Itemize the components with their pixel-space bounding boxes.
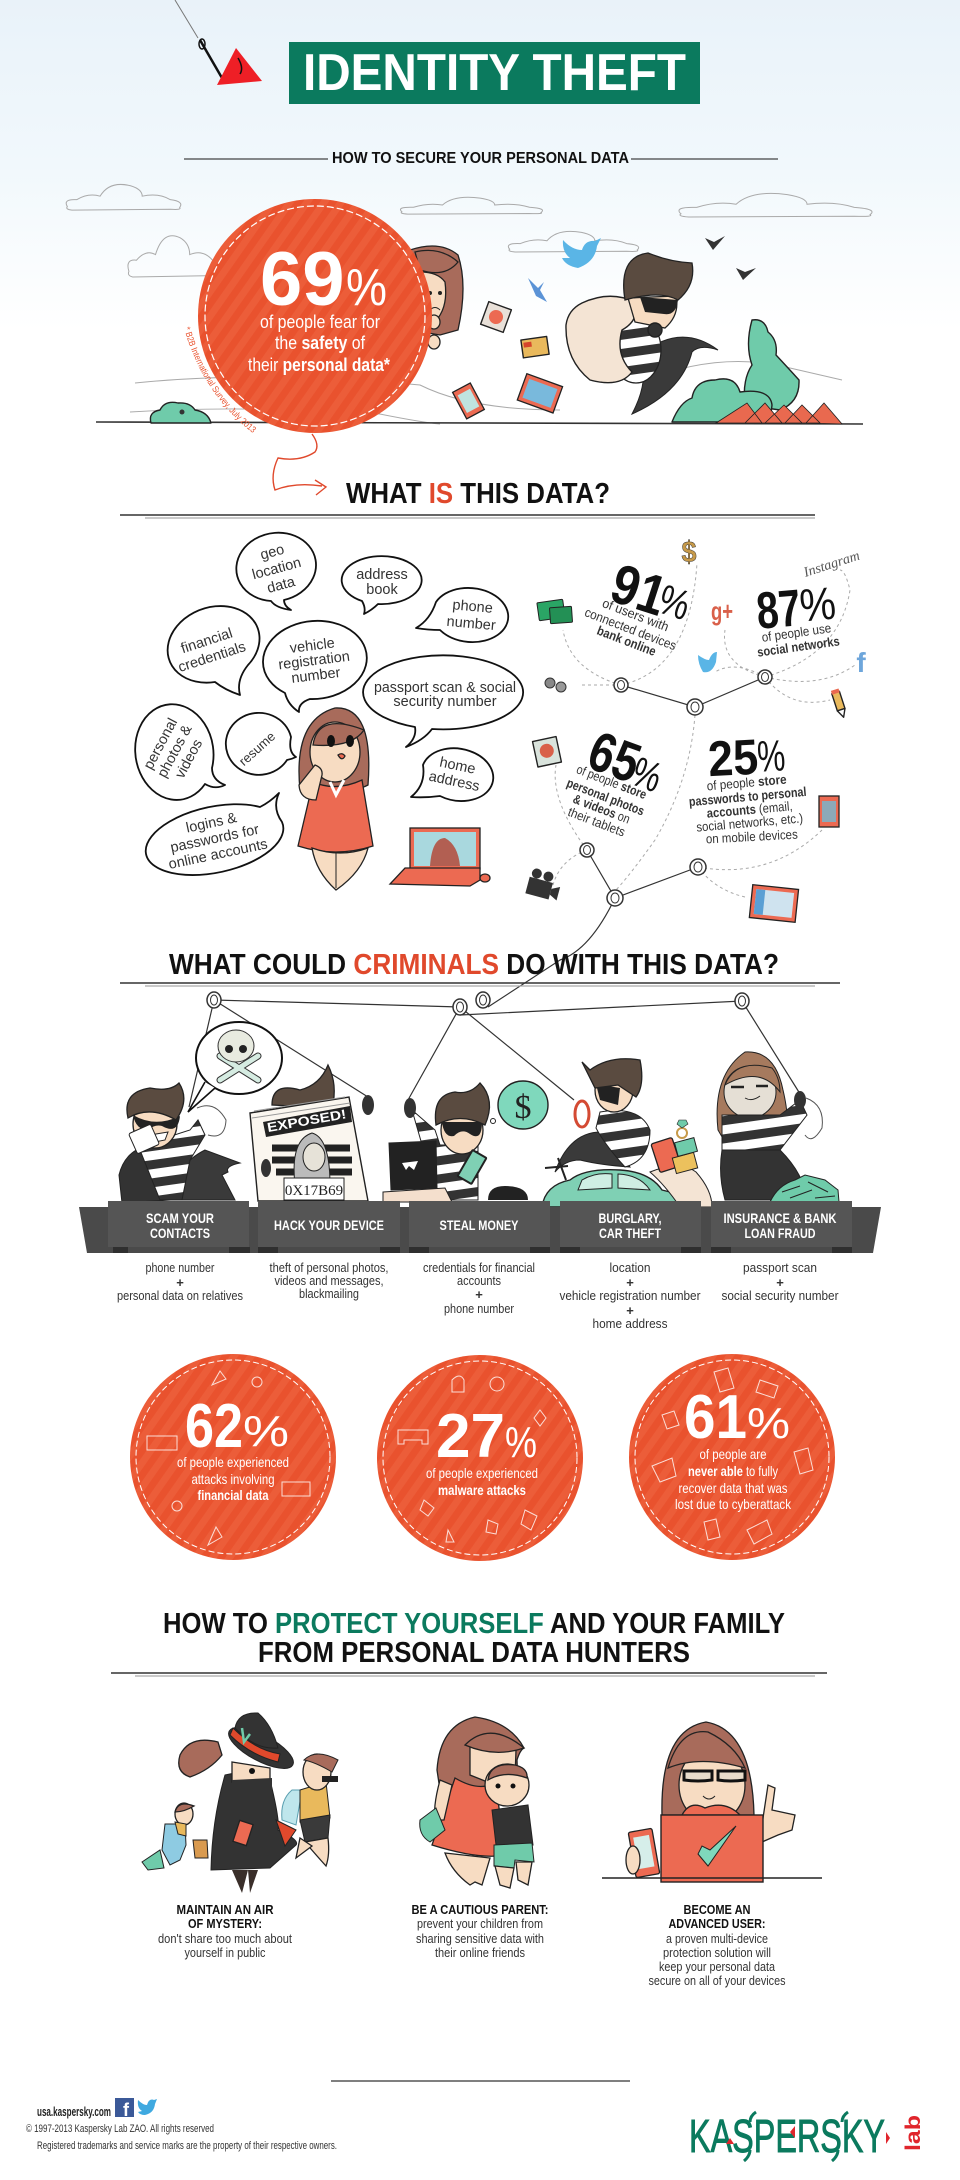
clouds	[66, 184, 872, 277]
stat: 65 percent: of people store	[574, 762, 649, 802]
money pile	[770, 1175, 839, 1202]
text: scam your contacts details: phone number	[146, 1260, 215, 1275]
title: IDENTITY THEFT	[303, 44, 686, 102]
stat circle: 62 percent: attacks involving	[192, 1471, 274, 1487]
stat circle: 62 percent: 62	[185, 1392, 243, 1461]
icon: facebook: f	[123, 2100, 130, 2120]
bubble: address book: book	[366, 582, 398, 598]
footer text	[26, 2104, 337, 2152]
stat circle: 62 percent	[130, 1354, 336, 1560]
bubble: phone number	[416, 588, 508, 642]
stat: 87 percent: 87	[754, 579, 803, 641]
stat circle: 61 percent	[629, 1354, 835, 1560]
text: burglary details	[560, 1260, 701, 1331]
bubble: passport scan and social security number: passport scan & social	[374, 680, 516, 696]
icon: phone	[453, 383, 484, 419]
bubble: personal photos and videos: photos &	[155, 722, 196, 781]
text: be a cautious parent: prevent your children from	[417, 1916, 543, 1931]
stat circle: 61 percent: never able to fully	[688, 1463, 778, 1479]
icon: fishing hook	[175, 0, 262, 85]
main stat circle: their personal data*	[248, 355, 390, 375]
heading: how to protect yourself: HOW TO PROTECT YOURSELF AND YOUR FAMILY	[163, 1608, 785, 1640]
text: maintain an air of mystery	[158, 1902, 292, 1960]
text: maintain an air of mystery: MAINTAIN AN AIR	[176, 1902, 274, 1917]
stat circle: 62 percent: %	[243, 1407, 289, 1456]
icon: instagram wordmark: Instagram	[801, 549, 862, 581]
stat circle: 61 percent: of people are	[700, 1446, 767, 1462]
bubble: resume: resume	[236, 729, 278, 769]
panel: steal money	[409, 1201, 550, 1253]
panel: hack your device	[258, 1201, 400, 1253]
child	[485, 1764, 534, 1888]
node	[607, 890, 623, 906]
bubble: geo location data: data	[265, 574, 298, 597]
car thief	[542, 1059, 687, 1207]
text: maintain an air of mystery: yourself in public	[184, 1945, 266, 1960]
bubble: vehicle registration number: number	[291, 665, 341, 687]
node	[690, 859, 706, 875]
hat	[223, 1713, 299, 1776]
stat circle: 27 percent: of people experienced	[426, 1465, 538, 1481]
thief with newspaper	[250, 1065, 374, 1201]
panel: steal money: STEAL MONEY	[440, 1217, 519, 1233]
icon: facebook f: f	[856, 647, 866, 678]
text: become an advanced user: ADVANCED USER:	[668, 1916, 766, 1931]
bubble: phone number: number	[446, 614, 496, 634]
text: burglary details: vehicle registration number	[560, 1288, 701, 1303]
bush right	[672, 320, 799, 422]
text: burglary details: +	[626, 1275, 634, 1290]
footer text: Registered trademarks and service marks are the property of their respective owners.	[37, 2140, 337, 2152]
text: burglary details: +	[626, 1303, 634, 1318]
text: steal money details: phone number	[444, 1301, 515, 1316]
text: be a cautious parent	[412, 1902, 548, 1960]
heading: how to protect yourself: FROM PERSONAL DATA HUNTERS	[258, 1637, 690, 1669]
dollar bubble	[490, 1081, 548, 1129]
pocket phone	[233, 1820, 253, 1846]
icon: coins	[545, 678, 566, 692]
main stat circle: %	[346, 259, 387, 317]
text: scam your contacts details	[117, 1260, 243, 1303]
bubble: geo location data: location	[251, 555, 303, 583]
main stat circle	[198, 199, 432, 433]
stat: 25 percent: of people store	[706, 772, 787, 793]
stat circle: 27 percent	[377, 1355, 583, 1561]
thief with sack	[566, 253, 718, 414]
text: become an advanced user: secure on all of your devices	[648, 1973, 786, 1988]
text: hack your device details: blackmailing	[299, 1286, 359, 1301]
icon: pencil	[831, 688, 847, 719]
stat: 87 percent: %	[797, 577, 838, 632]
icon: dollar sign: $	[682, 536, 697, 569]
stat: 87 percent: of people use	[761, 620, 832, 645]
text: hack your device details	[270, 1260, 388, 1301]
dollar bubble: $	[514, 1089, 532, 1126]
stat circle: 62 percent: of people experienced	[177, 1454, 289, 1470]
footer text: usa.kaspersky.com	[37, 2104, 111, 2119]
heading: what is this data: WHAT IS THIS DATA?	[346, 478, 610, 510]
network connectors	[189, 563, 855, 1107]
stat circle: 61 percent: lost due to cyberattack	[675, 1496, 792, 1512]
text: steal money details: credentials for financial	[423, 1260, 535, 1275]
heading: how to protect yourself	[111, 1608, 827, 1676]
thief with newspaper: 0X17B69	[285, 1183, 343, 1199]
main stat circle: of people fear for	[260, 312, 380, 332]
stat: 91 percent: 91	[604, 551, 674, 628]
bubble: home address	[411, 748, 493, 801]
subtitle: HOW TO SECURE YOUR PERSONAL DATA	[332, 150, 629, 167]
icon: photos	[481, 302, 511, 332]
stat: 91 percent: %	[653, 575, 696, 629]
icon: twitter small	[698, 652, 717, 672]
text: fraud details: +	[776, 1275, 784, 1290]
footer text: © 1997-2013 Kaspersky Lab ZAO. All rights reserved	[26, 2123, 214, 2135]
arrow: curly	[273, 434, 326, 495]
bubble: home address: home	[438, 755, 477, 778]
stat circle: 27 percent: malware attacks	[438, 1482, 526, 1498]
bubble: resume	[226, 713, 296, 775]
ribbon	[79, 1201, 881, 1253]
stat: 25 percent	[688, 729, 807, 846]
stat: 25 percent: social networks, etc.)	[696, 810, 804, 835]
peeking girl	[410, 246, 463, 349]
panel: burglary car theft	[560, 1201, 701, 1253]
icon: facebook	[115, 2098, 134, 2120]
panel: hack your device: HACK YOUR DEVICE	[274, 1217, 384, 1233]
bubble: personal photos and videos	[135, 704, 225, 800]
icon: google plus: g+	[711, 596, 733, 626]
stat circle: 61 percent: recover data that was	[678, 1480, 788, 1496]
text: maintain an air of mystery: don't share too much about	[158, 1931, 292, 1946]
text: fraud details: social security number	[722, 1288, 839, 1303]
icon: twitter	[138, 2099, 157, 2115]
text: hack your device details: theft of personal photos,	[270, 1260, 388, 1275]
bubble: geo location data: geo	[259, 542, 286, 563]
footnote: * B2B International Survey, July 2013	[186, 326, 256, 432]
panel: scam your contacts: SCAM YOUR	[146, 1210, 214, 1226]
panel: burglary car theft: CAR THEFT	[599, 1225, 661, 1241]
text: become an advanced user: protection solution will	[663, 1945, 771, 1960]
bubble: vehicle registration number	[263, 621, 367, 712]
icon: tablet coral	[749, 885, 799, 922]
text: scam your contacts details: +	[176, 1275, 184, 1290]
text: become an advanced user: keep your personal data	[659, 1959, 776, 1974]
panel: scam your contacts: CONTACTS	[150, 1225, 210, 1241]
text: be a cautious parent: sharing sensitive data with	[416, 1931, 544, 1946]
text: become an advanced user: BECOME AN	[684, 1902, 750, 1917]
node	[207, 992, 221, 1008]
skull bubble	[188, 1022, 282, 1112]
stat: 91 percent: of users with	[600, 595, 671, 634]
text: hack your device details: videos and messages,	[274, 1273, 384, 1288]
panel: insurance and bank loan fraud: LOAN FRAUD	[744, 1225, 816, 1241]
bubble: passport scan and social security number	[363, 655, 523, 747]
stat circle: 27 percent: %	[505, 1418, 537, 1467]
laptop	[390, 828, 490, 886]
stat: 25 percent: passwords to personal	[688, 784, 807, 809]
node	[735, 993, 749, 1009]
bubble: logins and passwords: online accounts	[167, 836, 269, 873]
icon: credit cards	[521, 336, 549, 358]
stat: 65 percent: their tablets	[566, 804, 628, 840]
bubble: personal photos and videos: personal	[141, 716, 181, 772]
bubble: logins and passwords: passwords for	[169, 822, 261, 856]
girl thinking	[298, 708, 373, 890]
node	[758, 670, 772, 684]
bubble: geo location data	[236, 533, 316, 610]
node	[453, 999, 467, 1015]
figure: mystery woman with children	[142, 1713, 338, 1893]
icon: phone coral	[819, 796, 839, 827]
main stat circle: the safety of	[275, 333, 366, 353]
bubble: logins and passwords: logins &	[185, 810, 239, 837]
thief with laptop	[383, 1083, 528, 1202]
icon: facebook bird	[528, 278, 547, 302]
text: scam your contacts details: personal data on relatives	[117, 1288, 243, 1303]
speech bubbles	[135, 533, 523, 875]
stat circle: 61 percent: 61	[684, 1383, 747, 1452]
bubble: vehicle registration number: registration	[278, 649, 351, 673]
bubble: financial credentials	[168, 606, 260, 695]
text: fraud details: passport scan	[743, 1260, 817, 1275]
bush left	[150, 402, 211, 423]
icon: video camera	[525, 867, 563, 902]
stat: 65 percent: 65	[580, 719, 649, 795]
bubble: personal photos and videos: videos	[172, 737, 206, 781]
footer divider	[331, 2080, 630, 2082]
bubble: financial credentials: financial	[179, 626, 235, 657]
stat: 91 percent: bank online	[595, 623, 658, 659]
bubble: address book: address	[356, 567, 408, 583]
stat: 87 percent	[754, 577, 841, 660]
logo: kaspersky lab: KASPERSKY	[689, 2110, 885, 2162]
main stat circle: 69	[260, 237, 345, 322]
text: burglary details: home address	[592, 1316, 668, 1331]
text: steal money details: +	[475, 1287, 483, 1302]
sack of loot	[650, 1120, 712, 1207]
figure: advanced user	[602, 1722, 822, 1882]
female thief	[717, 1052, 822, 1200]
stat: 65 percent: %	[626, 748, 668, 801]
logo: kaspersky lab: lab	[902, 2115, 925, 2151]
text: become an advanced user	[648, 1902, 786, 1988]
panel: burglary car theft: BURGLARY,	[598, 1210, 662, 1226]
heading: what could criminals do: WHAT COULD CRIMINALS DO WITH THIS DATA?	[169, 949, 779, 981]
roof triangles	[716, 403, 842, 424]
icon: tablet	[517, 374, 563, 413]
birds	[705, 236, 756, 280]
text: steal money details	[423, 1260, 535, 1316]
text: maintain an air of mystery: OF MYSTERY:	[188, 1916, 262, 1931]
bubble: logins and passwords	[146, 793, 283, 875]
child with backpack	[282, 1754, 338, 1866]
bubble: phone number: phone	[452, 597, 493, 617]
bubble: home address: address	[427, 769, 481, 795]
panel: scam your contacts	[108, 1201, 250, 1253]
figure: mother and child	[420, 1717, 534, 1888]
node	[614, 678, 628, 692]
stat: 65 percent: & videos on	[571, 791, 632, 827]
coat	[211, 1772, 297, 1870]
panel: insurance and bank loan fraud: INSURANCE & BANK	[724, 1210, 836, 1226]
icon: twitter bird	[562, 238, 601, 268]
text: steal money details: accounts	[457, 1273, 501, 1288]
node	[687, 699, 703, 715]
text: fraud details	[722, 1260, 839, 1303]
stat circle: 62 percent: financial data	[198, 1487, 269, 1503]
stat: 25 percent: accounts (email,	[706, 798, 793, 821]
bubble: financial credentials: credentials	[176, 639, 248, 676]
panel: insurance and bank loan fraud	[711, 1201, 852, 1253]
stat: 25 percent: %	[756, 731, 787, 782]
node	[580, 843, 594, 857]
stat: 87 percent: social networks	[756, 633, 841, 660]
node	[476, 992, 490, 1008]
stat: 65 percent: personal photos	[565, 775, 647, 818]
stat: 25 percent: on mobile devices	[705, 827, 799, 846]
small child	[142, 1803, 208, 1870]
stat: 65 percent	[565, 719, 668, 840]
sky background	[0, 0, 960, 330]
stat circle: 61 percent: %	[747, 1399, 790, 1448]
icon: photos stack	[533, 737, 561, 767]
thief with newspaper: EXPOSED!	[266, 1106, 347, 1135]
bubble: address book	[342, 556, 422, 614]
text: burglary details: location	[610, 1260, 650, 1275]
bubble: vehicle registration number: vehicle	[289, 635, 336, 657]
stat: 91 percent	[583, 551, 696, 659]
stat: 25 percent: 25	[707, 729, 760, 787]
text: be a cautious parent: BE A CAUTIOUS PARENT:	[412, 1902, 548, 1917]
stat: 91 percent: connected devices	[583, 604, 679, 653]
hills and ground	[96, 362, 863, 424]
stat circle: 27 percent: 27	[436, 1402, 505, 1471]
text: become an advanced user: a proven multi-device	[666, 1931, 768, 1946]
icon: green cards	[537, 599, 573, 624]
text: be a cautious parent: their online friends	[435, 1945, 525, 1960]
thief: scam your contacts	[119, 1083, 240, 1203]
bubble: passport scan and social security number: security number	[393, 694, 497, 710]
mother	[420, 1717, 524, 1885]
